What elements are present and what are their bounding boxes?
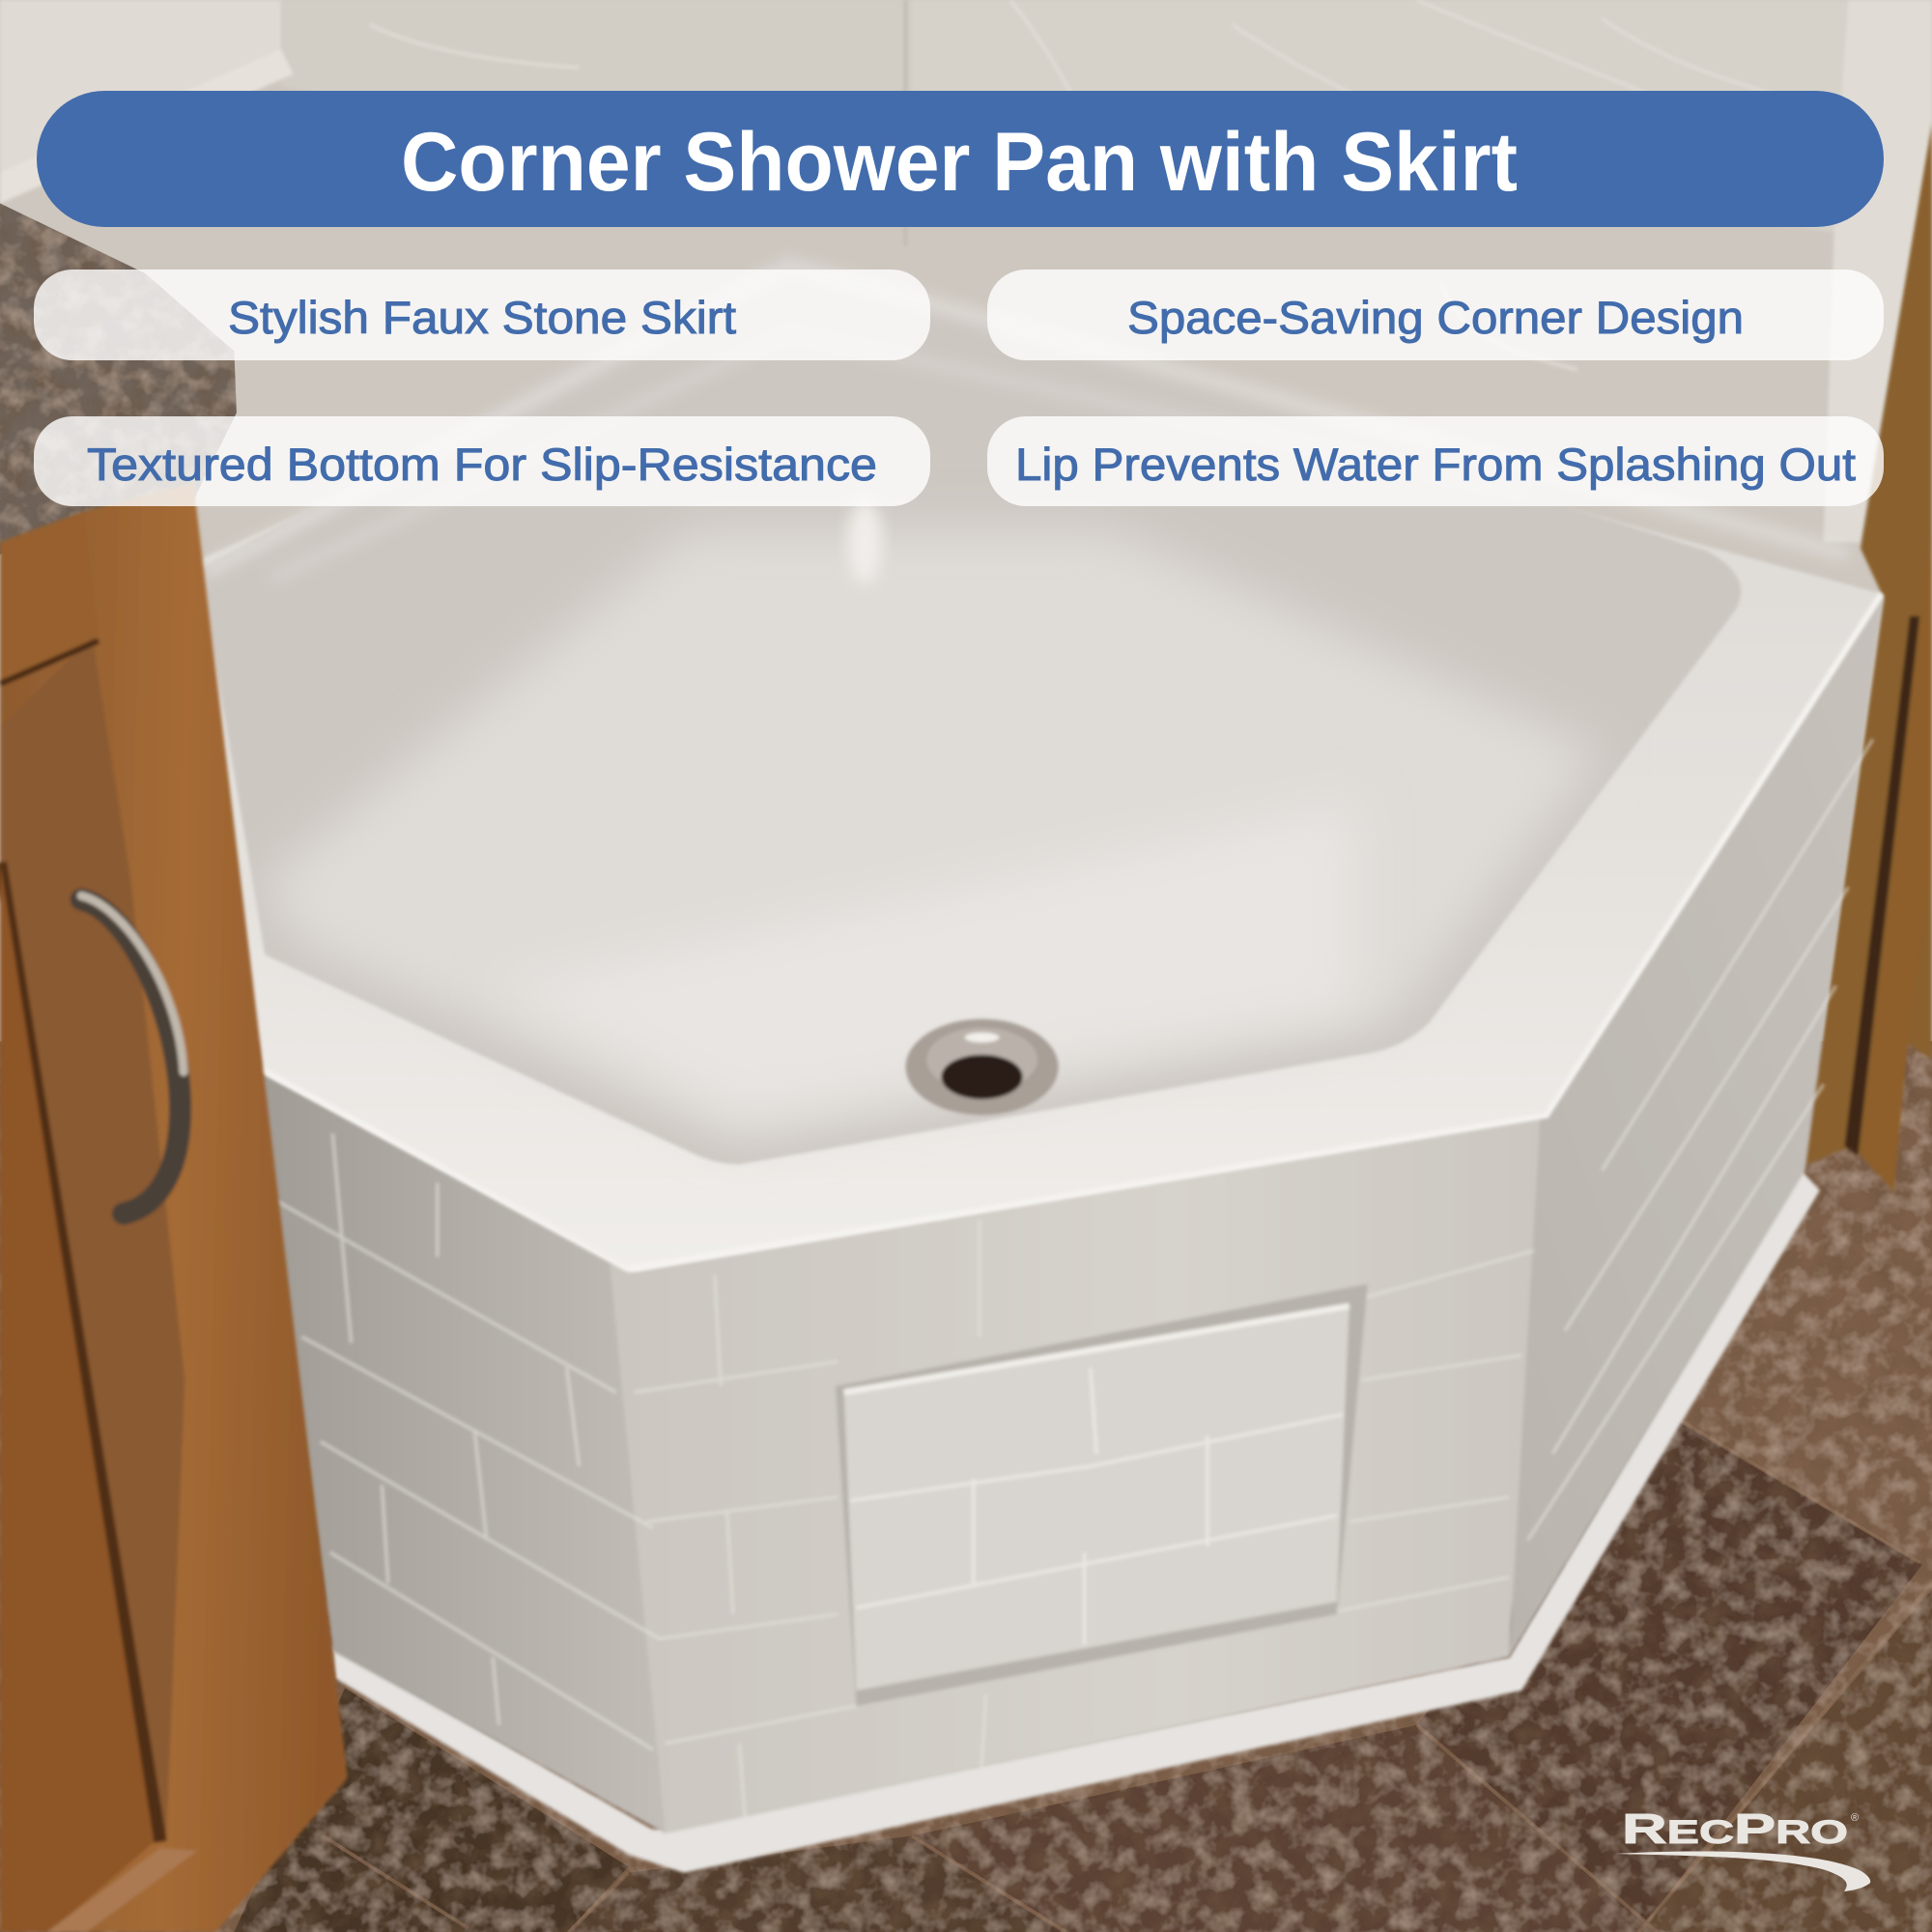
title text: Corner Shower Pan with Skirt [401,116,1518,209]
skirt: front face [610,1109,1550,1833]
title banner [37,91,1884,227]
stone skirt [252,598,1882,1833]
feature pill: lip [987,416,1884,506]
wood door trim [1804,124,1932,1191]
base trim [332,1168,1820,1873]
feature pill: stone skirt [34,270,930,360]
feature pill: stone skirt: Stylish Faux Stone Skirt [228,292,736,343]
skirt: right face [1509,598,1882,1658]
basin highlight [848,500,882,584]
RecPro logo [1615,1805,1870,1891]
rim streaks behind pills [203,265,1848,579]
feature pill: corner design: Space-Saving Corner Design [1127,292,1744,343]
shower wall [0,0,1932,1233]
feature pill: textured bottom: Textured Bottom For Slip-Resistance [87,439,877,490]
wood cabinet [0,483,348,1932]
drain [905,1019,1059,1115]
feature pill: corner design [987,270,1884,360]
countertop [0,203,237,554]
RecPro logo: R EC P RO [1622,1805,1848,1853]
RecPro logo: ® [1851,1812,1859,1824]
skirt: left face [252,1060,666,1833]
brick joints [277,739,1873,1824]
basin interior [200,252,1741,1164]
feature pill: textured bottom [34,416,930,506]
access panel [836,1284,1368,1707]
basin floor [259,529,1602,1140]
cabinet handle [81,899,181,1213]
floor tiles [0,1041,1932,1932]
pan rim [197,296,1882,1271]
feature pill: lip: Lip Prevents Water From Splashing Out [1015,439,1856,490]
